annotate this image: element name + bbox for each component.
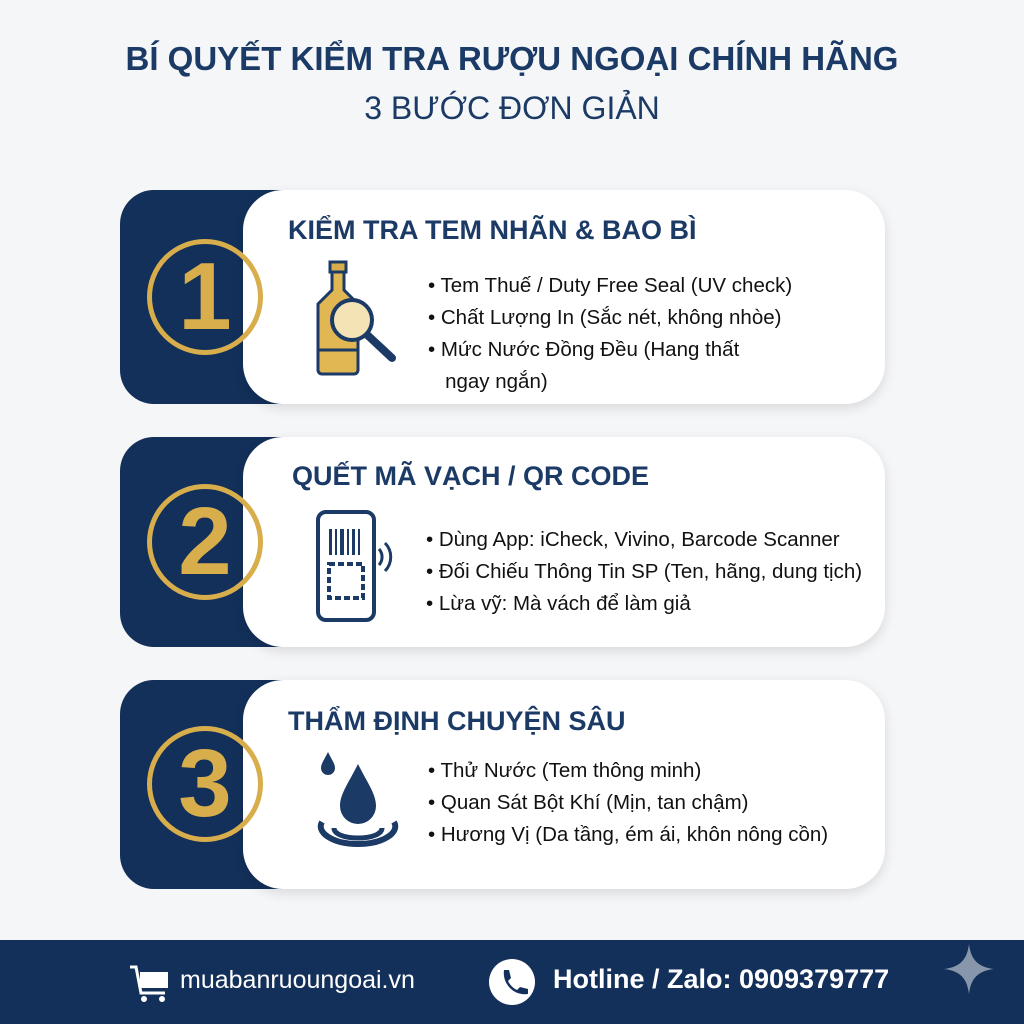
number 1: 1 [178,243,232,350]
bullets 2: • Dùng App: iCheck, Vivino, Barcode Scanner [426,528,840,551]
bullets 3: • Hương Vị (Da tầng, ém ái, khôn nông cồn) [428,823,828,846]
icon: phone scanning [316,510,392,622]
number 2 [147,484,263,600]
panel: step 1 [120,190,888,412]
bullets 3: • Quan Sát Bột Khí (Mịn, tan chậm) [428,791,749,814]
heading 3: THẨM ĐỊNH CHUYỆN SÂU [288,706,626,736]
bullets 1: • Chất Lượng In (Sắc nét, không nhòe) [428,306,781,329]
number 1 [147,239,263,355]
panel: step 3 [120,680,888,896]
bullets 1: • Mức Nước Đồng Đều (Hang thất [428,338,739,361]
heading 1: KIỂM TRA TEM NHÃN & BAO BÌ [288,215,696,245]
bullets 2 [426,528,862,615]
icon: water drop [318,752,398,847]
number 3: 3 [178,730,232,837]
number 3 [147,726,263,842]
heading 2: QUẾT MÃ VẠCH / QR CODE [292,461,649,491]
icon: sparkle [944,944,994,994]
subtitle: 3 BƯỚC ĐƠN GIẢN [364,90,660,126]
bullets 3: • Thử Nước (Tem thông minh) [428,759,701,782]
hotline: Hotline / Zalo: 0909379777 [553,964,889,994]
title: BÍ QUYẾT KIỂM TRA RƯỢU NGOẠI CHÍNH HÃNG [126,40,898,77]
icon: cart [130,966,168,1002]
website: muabanruoungoai.vn [180,966,415,994]
bullets 2: • Lừa vỹ: Mà vách để làm giả [426,592,691,615]
icon: phone [489,959,535,1005]
bullets 3 [428,759,828,846]
bullets 1 [428,274,792,393]
panel: step 2 [120,437,888,654]
bullets 2: • Đối Chiếu Thông Tin SP (Ten, hãng, dung tịch) [426,560,862,583]
number 2: 2 [178,488,232,595]
footer [0,940,1024,1024]
icon: bottle with magnifier [316,260,396,376]
bullets 1: ngay ngắn) [445,370,548,393]
bullets 1: • Tem Thuế / Duty Free Seal (UV check) [428,274,792,297]
